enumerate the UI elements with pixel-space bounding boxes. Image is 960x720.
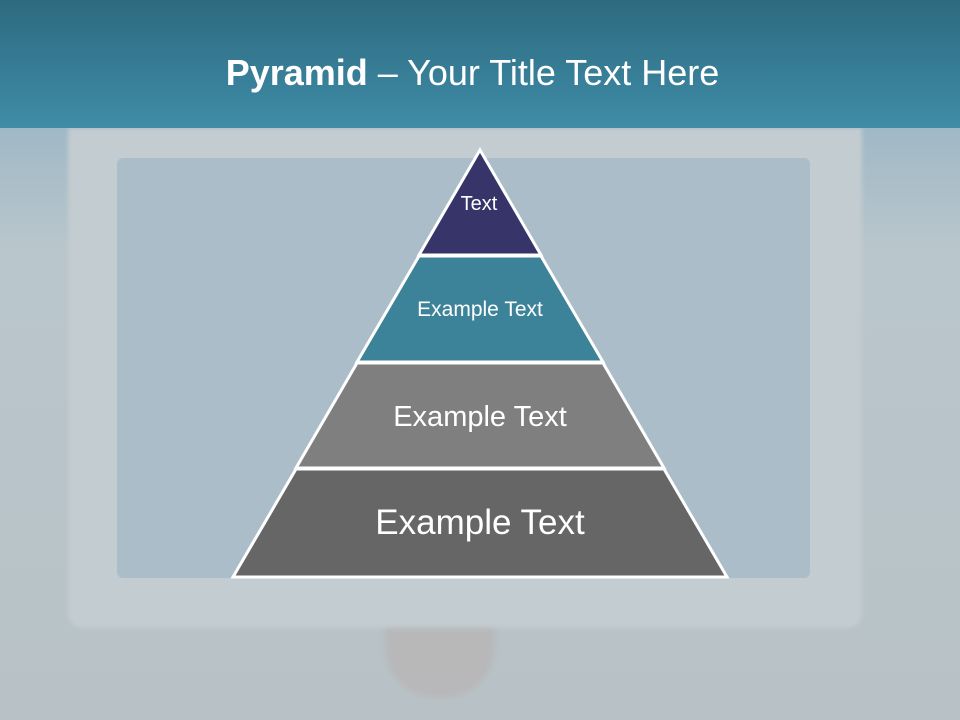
tier 3 bbox=[296, 363, 664, 468]
tier 1 bbox=[419, 150, 541, 255]
header band bbox=[0, 0, 960, 128]
tier 2: Example Text bbox=[417, 298, 543, 321]
tier 4 bbox=[233, 469, 727, 577]
tablet screen bbox=[117, 158, 810, 578]
tablet frame bbox=[68, 128, 862, 628]
tier 2 bbox=[357, 256, 603, 362]
tier 4: Example Text bbox=[375, 503, 585, 542]
tier 1: Text bbox=[461, 193, 498, 215]
hand bbox=[385, 628, 495, 698]
title: Pyramid – Your Title Text Here bbox=[226, 52, 719, 93]
tier 3: Example Text bbox=[393, 401, 567, 433]
